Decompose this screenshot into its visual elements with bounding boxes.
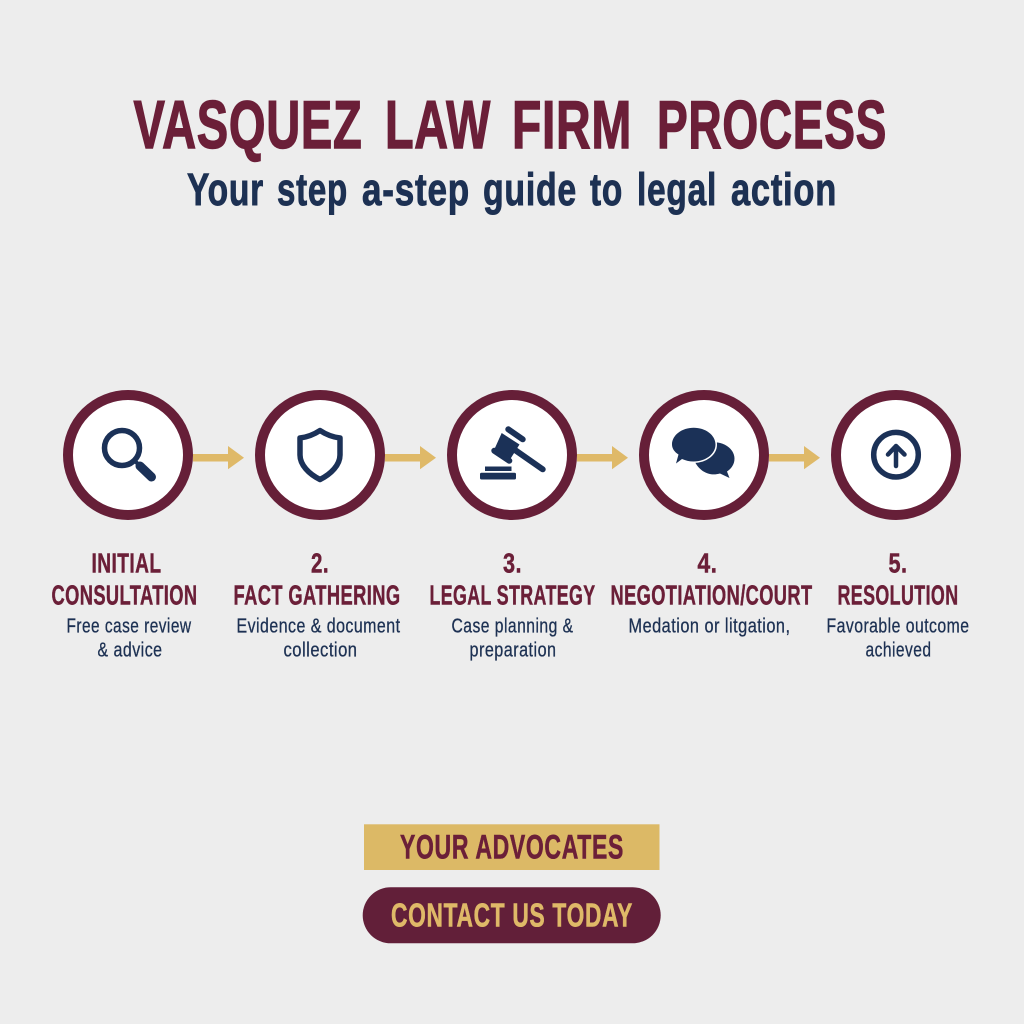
step 5 icon: up arrow in circle [836, 395, 956, 515]
subtitle: guide [483, 164, 577, 215]
step 4 text: NEGOTIATION/COURT [610, 579, 812, 610]
arrow 1 [193, 446, 244, 469]
step 1 text: CONSULTATION [52, 579, 198, 610]
arrow 2 [385, 446, 436, 469]
step 4 icon: speech bubbles [644, 395, 764, 515]
title: PROCESS [657, 87, 887, 163]
step 1 text [52, 547, 198, 662]
button: contact us today: CONTACT US TODAY [391, 897, 633, 934]
subtitle: Your [187, 164, 264, 215]
title: FIRM [512, 87, 632, 163]
arrow 4 [769, 446, 820, 469]
step 1 icon: magnifying glass [68, 395, 188, 515]
step 1 text: & advice [98, 639, 162, 662]
subtitle [187, 164, 837, 215]
step 5 text [826, 547, 970, 662]
arrow 3 [577, 446, 628, 469]
step 1 text: Free case review [66, 615, 192, 638]
subtitle: step [277, 164, 348, 215]
subtitle: legal [637, 164, 717, 215]
button: contact us today [363, 887, 661, 943]
title: VASQUEZ [134, 87, 362, 163]
step 5 text: RESOLUTION [838, 579, 958, 610]
step 2 icon: shield [260, 395, 380, 515]
banner: your advocates: YOUR ADVOCATES [400, 828, 624, 866]
subtitle: action [731, 164, 837, 215]
step 3 text: preparation [470, 639, 556, 662]
step 3 text: Case planning & [452, 615, 574, 638]
step 5 text: achieved [866, 639, 932, 662]
step 3 text [430, 547, 596, 662]
step 3 text: LEGAL STRATEGY [430, 579, 596, 610]
step 2 text: Evidence & document [236, 615, 400, 638]
step 2 text: collection [284, 639, 358, 662]
step 5 text: 5. [888, 547, 908, 578]
step 2 text: FACT GATHERING [234, 579, 400, 610]
step 1 text: INITIAL [92, 547, 162, 578]
step 3 icon: gavel [452, 395, 572, 515]
step 5 text: Favorable outcome [826, 615, 970, 638]
step 4 text: Medation or litgation, [628, 615, 790, 638]
subtitle: to [590, 164, 623, 215]
banner: your advocates [364, 824, 660, 870]
step 3 text: 3. [503, 547, 522, 578]
title: LAW [385, 87, 491, 163]
title [134, 87, 887, 163]
subtitle: a-step [362, 164, 470, 215]
step 4 text: 4. [698, 547, 718, 578]
step 4 text [610, 547, 812, 638]
step 2 text [234, 547, 400, 662]
step 2 text: 2. [311, 547, 329, 578]
